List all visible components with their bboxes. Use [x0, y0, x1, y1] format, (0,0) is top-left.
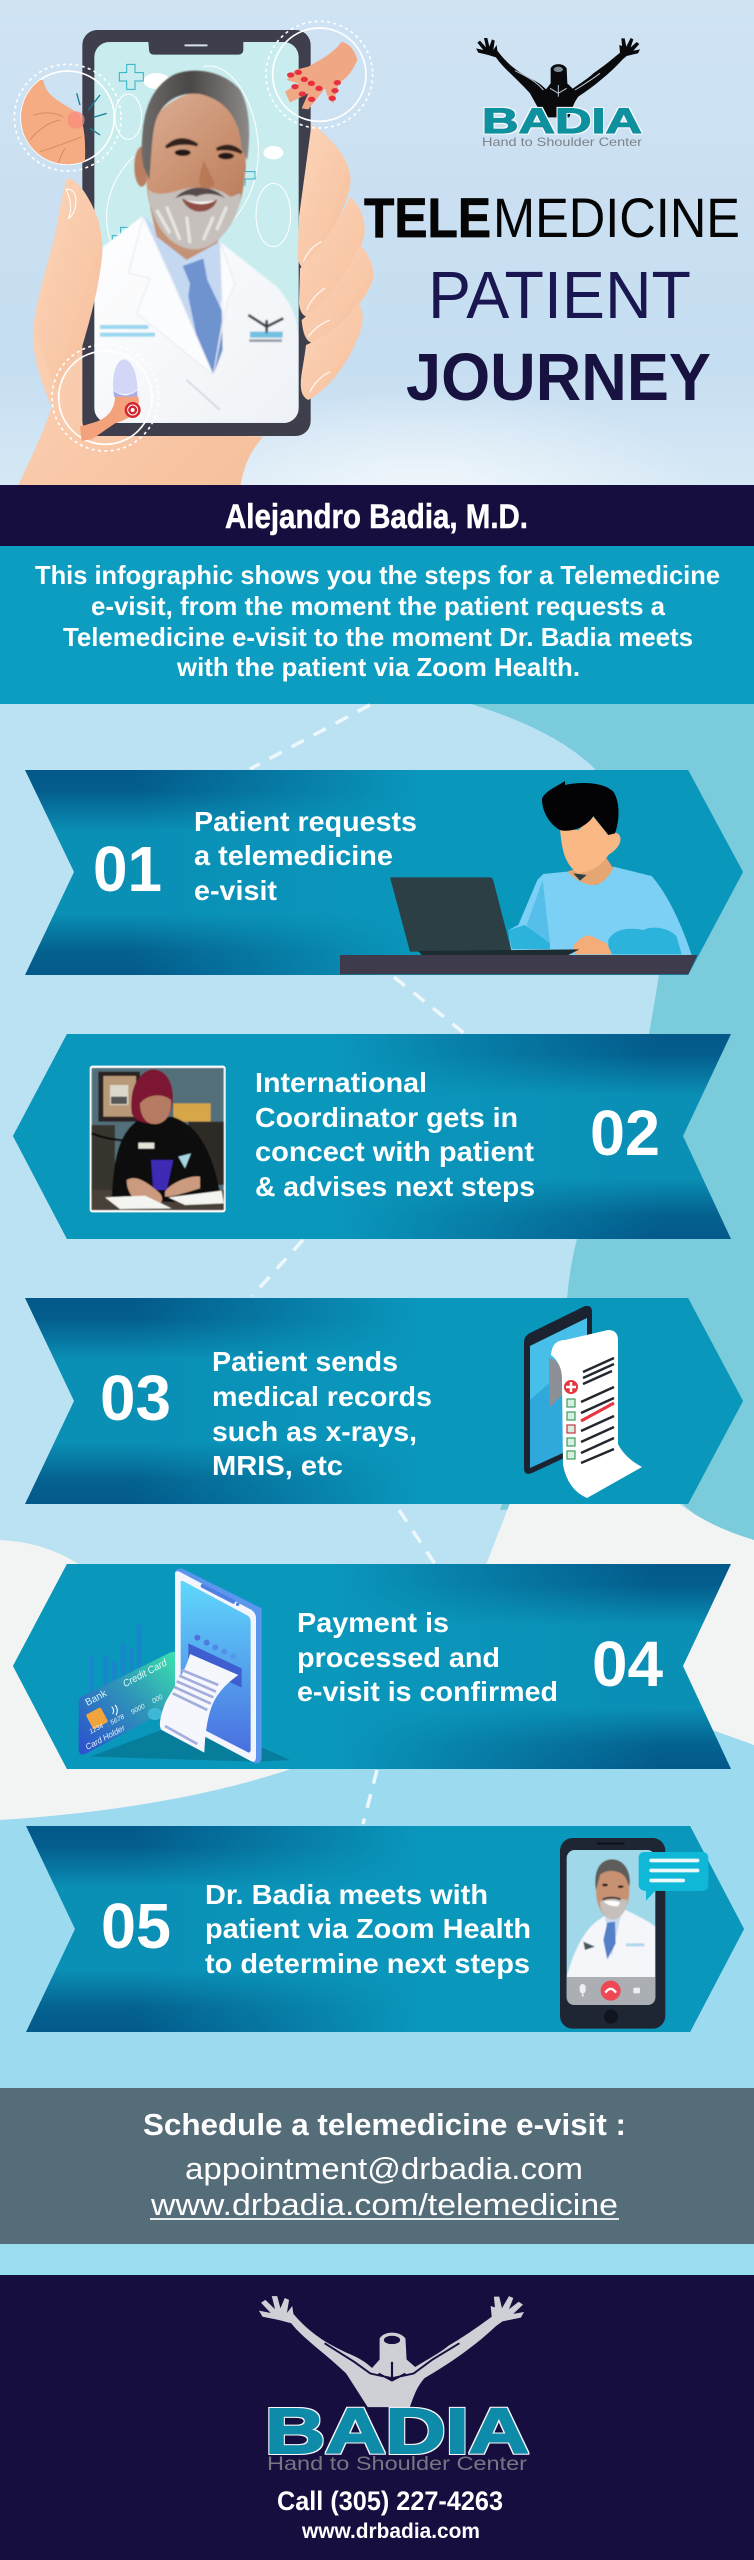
step 1 text: [194, 806, 417, 906]
number 04: 04: [592, 1628, 663, 1700]
phone in hand illustration: [13, 21, 373, 485]
logo figure: [476, 38, 640, 117]
title: PATIENT: [428, 258, 691, 333]
step 4 text: processed and: [297, 1642, 500, 1673]
step 2 text: [255, 1067, 535, 1202]
step 5 text: to determine next steps: [205, 1948, 530, 1979]
illustration: credit card and phone receipt: Credit Card: [121, 1657, 169, 1690]
circle: hand with red spots: [266, 21, 373, 128]
illustration: credit card and phone receipt: 1234: [88, 1722, 105, 1736]
phone body: [82, 30, 311, 436]
intro text band: This infographic shows you the steps for a Telemedicine: [35, 560, 720, 590]
hand palm: [18, 227, 263, 485]
step 4 text: Payment is: [297, 1607, 449, 1638]
number 02: 02: [590, 1097, 660, 1169]
step 5 text: Dr. Badia meets with: [205, 1879, 488, 1910]
doctor name band: [0, 485, 754, 547]
step 1 panel: [25, 770, 743, 975]
number 01: 01: [93, 833, 162, 905]
step 1 text: e-visit: [194, 875, 277, 906]
illustration: credit card and phone receipt: Card Holder: [84, 1722, 128, 1752]
illustration: credit card and phone receipt: 5678: [109, 1713, 126, 1727]
light spacer: [0, 2244, 754, 2275]
circle: shoulder pain: [13, 64, 121, 171]
illustration: video call phone: [560, 1838, 708, 2029]
step 5 panel: [26, 1826, 744, 2032]
logo wordmark footer: BADIA: [265, 2395, 529, 2467]
phone number: Call (305) 227-4263: [277, 2486, 503, 2516]
circle: elbow target: [52, 344, 159, 451]
illustration: credit card and phone receipt: [79, 1568, 290, 1763]
step 2 panel: [13, 1034, 731, 1239]
title: TELE: [364, 186, 491, 249]
illustration: phone with medical record: [524, 1306, 642, 1498]
arrow banner 5: [26, 1826, 744, 2032]
website: www.drbadia.com: [301, 2520, 480, 2543]
arrow banner 4: [13, 1564, 731, 1769]
arrow banner 2: [13, 1034, 731, 1239]
illustration: credit card and phone receipt: 000: [151, 1694, 164, 1705]
title: [364, 186, 740, 415]
schedule band: Schedule a telemedicine e-visit :: [143, 2107, 626, 2142]
intro text band: [0, 546, 754, 704]
arrow banner 1: [25, 770, 743, 975]
step 3 text: such as x-rays,: [212, 1416, 417, 1447]
step 3 panel: [25, 1298, 743, 1504]
steps background shapes: [0, 704, 754, 2090]
number 05: 05: [101, 1890, 171, 1962]
step 3 text: [212, 1346, 432, 1481]
step 2 text: Coordinator gets in: [255, 1102, 518, 1133]
step 2 text: International: [255, 1067, 427, 1098]
step 1 text: a telemedicine: [194, 840, 393, 871]
right fingers: [66, 123, 373, 400]
step 4 text: [297, 1607, 558, 1707]
doctor name band: Alejandro Badia, M.D.: [225, 498, 528, 536]
logo tagline footer: Hand to Shoulder Center: [267, 2454, 528, 2475]
step 3 text: MRIS, etc: [212, 1450, 343, 1481]
step 5 text: patient via Zoom Health: [205, 1913, 531, 1944]
intro text band: with the patient via Zoom Health.: [176, 652, 580, 682]
illustration: credit card and phone receipt: Bank: [84, 1688, 109, 1709]
footer panel: [0, 2275, 754, 2560]
intro text band: Telemedicine e-visit to the moment Dr. Badia meets: [63, 622, 693, 652]
dashed connector lines: [250, 705, 464, 1824]
logo tagline: Hand to Shoulder Center: [482, 135, 642, 149]
schedule band: appointment@drbadia.com: [185, 2151, 583, 2186]
number 03: 03: [100, 1362, 171, 1434]
step 4 text: e-visit is confirmed: [297, 1676, 558, 1707]
step 1 text: Patient requests: [194, 806, 417, 837]
step 2 text: concect with patient: [255, 1136, 534, 1167]
arrow banner 3: [25, 1298, 743, 1504]
logo figure footer: [259, 2296, 524, 2407]
header background: [0, 0, 754, 610]
intro text band: e-visit, from the moment the patient requests a: [91, 591, 666, 621]
illustration: credit card and phone receipt: 9000: [130, 1703, 147, 1716]
photo: international coordinator: [90, 1066, 226, 1212]
step 3 text: Patient sends: [212, 1346, 398, 1377]
logo: Badia top: [476, 38, 642, 149]
logo wordmark: BADIA: [482, 102, 642, 141]
title: JOURNEY: [406, 340, 711, 415]
schedule band: www.drbadia.com/telemedicine: [150, 2187, 618, 2222]
illustration: person at laptop: [340, 781, 697, 974]
schedule band: [0, 2088, 754, 2244]
step 5 text: [205, 1879, 531, 1979]
thumb over phone: [33, 179, 102, 390]
step 4 panel: [13, 1564, 731, 1769]
step 3 text: medical records: [212, 1381, 432, 1412]
doctor portrait: [94, 71, 299, 423]
step 2 text: & advises next steps: [255, 1171, 535, 1202]
